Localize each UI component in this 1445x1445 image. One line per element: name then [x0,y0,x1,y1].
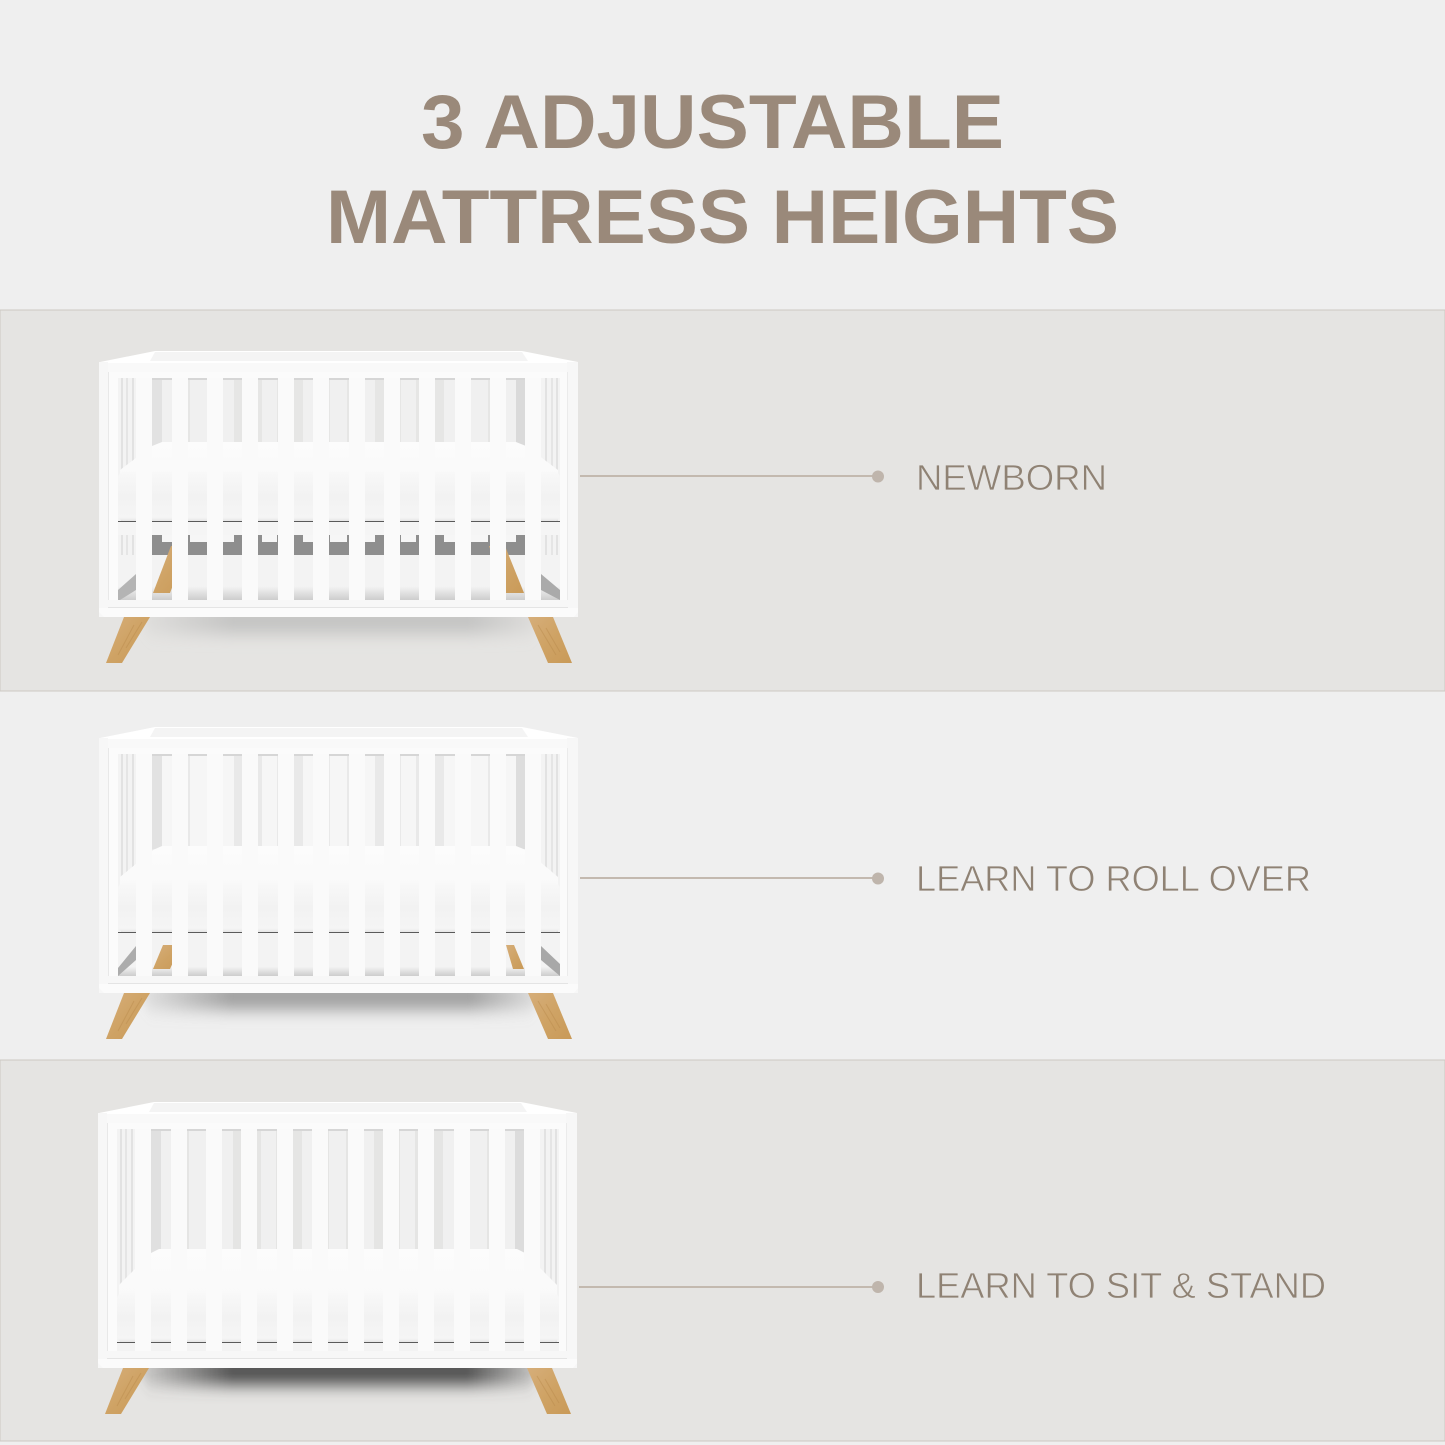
callout: newborn [580,457,1107,498]
floor shadow [124,1357,554,1385]
support rail [118,933,560,945]
frame [98,1102,577,1368]
callout: learn to roll over [580,858,1311,899]
side bars [117,1129,559,1351]
support rail [117,1343,559,1351]
back slats [161,1129,515,1351]
back legs [153,546,188,593]
front legs [106,993,572,1039]
title: 3 ADJUSTABLE [421,80,1004,165]
side bars [118,754,560,976]
side bars [118,378,560,600]
back slats [162,378,516,600]
crib: lowest mattress position [98,1102,577,1414]
frame [99,351,578,617]
floor shadow [125,606,555,634]
back legs [153,945,181,969]
support rail [118,522,560,535]
crib: highest mattress position [99,351,578,663]
front legs [106,617,572,663]
crib: middle mattress position [99,727,578,1039]
callout: learn to sit and stand [579,1265,1326,1306]
gray shadow band [152,535,525,555]
title [326,80,1119,260]
mattress [119,1249,557,1296]
panel: sit and stand band [0,1060,1445,1441]
frame [99,727,578,993]
back wall [117,1129,559,1351]
callout: learn to sit and stand: LEARN TO SIT & STAND [916,1265,1326,1306]
floor shadow [125,982,555,1010]
panel: newborn band [0,310,1445,691]
front slats [135,1129,540,1351]
front legs [105,1368,571,1414]
back wall [118,754,560,976]
back slats [162,754,516,976]
callout: newborn: NEWBORN [916,457,1107,498]
back wall [118,378,560,600]
front slats [136,378,541,600]
front slats [136,754,541,976]
callout: learn to roll over: LEARN TO ROLL OVER [916,858,1311,899]
mattress [120,846,558,886]
mattress [120,442,558,476]
title: MATTRESS HEIGHTS [326,175,1119,260]
floor under crib [118,555,560,600]
floor under crib [118,945,560,976]
